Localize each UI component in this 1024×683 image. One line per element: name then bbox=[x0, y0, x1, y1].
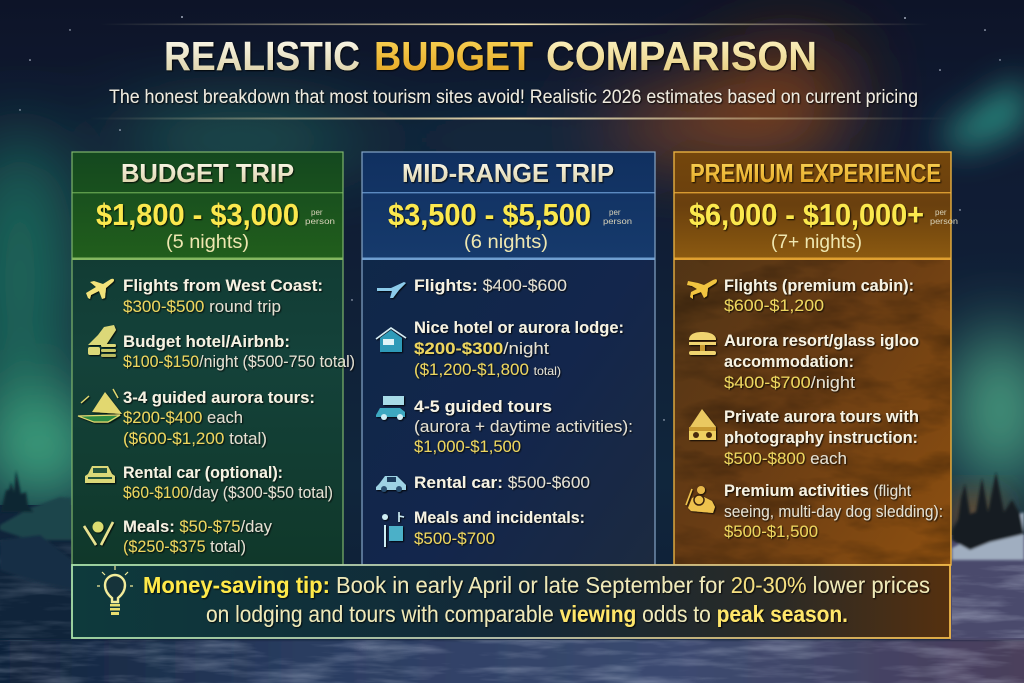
premium item: activities bbox=[686, 482, 943, 541]
tip text: on lodging and tours with comparable viewing odds to peak season. bbox=[206, 601, 848, 627]
tip text: Money-saving tip: Book in early April or late September for 20-30% lower prices bbox=[143, 572, 930, 598]
mid-range item: lodging: Nice hotel or aurora lodge: bbox=[414, 319, 624, 337]
budget item: flights: Flights from West Coast: bbox=[123, 277, 323, 295]
mid-range panel header: MID-RANGE TRIP bbox=[402, 158, 614, 188]
icon: light bulb bbox=[97, 566, 133, 615]
mid-range item: meals: Meals and incidentals: bbox=[414, 509, 585, 527]
mid-range panel body bbox=[362, 152, 655, 565]
budget item: hotel: Budget hotel/Airbnb: bbox=[123, 333, 290, 351]
premium panel header bbox=[674, 152, 958, 565]
premium panel header: per bbox=[935, 208, 947, 217]
mid-range panel header: (6 nights) bbox=[464, 232, 548, 253]
mid-range item: tours bbox=[376, 396, 633, 456]
budget item: aurora tours: 3-4 guided aurora tours: bbox=[123, 389, 315, 407]
premium panel body bbox=[674, 152, 951, 565]
budget item: flights bbox=[86, 277, 323, 316]
mid-range panel header: $3,500 - $5,500 bbox=[388, 197, 591, 232]
mid-range panel header: person bbox=[603, 217, 632, 226]
premium item: activities: seeing, multi-day dog sledding): bbox=[724, 503, 943, 521]
mid-range item: rental car: Rental car: $500-$600 bbox=[414, 474, 590, 492]
panel: premium experience bbox=[674, 152, 958, 565]
premium item: activities: $500-$1,500 bbox=[724, 523, 818, 541]
premium item: activities: Premium activities (flight bbox=[724, 482, 912, 500]
budget panel header bbox=[72, 152, 343, 565]
premium item: igloo accommodation: accommodation: bbox=[724, 353, 854, 371]
mid-range panel header: per bbox=[609, 208, 621, 217]
premium item: private tours: photography instruction: bbox=[724, 429, 918, 447]
budget panel body bbox=[72, 152, 343, 565]
premium item: flights bbox=[687, 277, 914, 315]
budget item: meals: ($250-$375 total) bbox=[123, 538, 246, 556]
budget panel header: BUDGET TRIP bbox=[121, 158, 294, 188]
title: REALISTIC bbox=[164, 33, 360, 79]
budget item: aurora tours: ($600-$1,200 total) bbox=[123, 430, 267, 448]
budget panel header: person bbox=[305, 217, 335, 226]
premium item: private tours: $500-$800 each bbox=[724, 450, 847, 468]
mid-range item: tours: $1,000-$1,500 bbox=[414, 438, 521, 456]
budget item: hotel bbox=[88, 325, 355, 371]
premium panel header: PREMIUM EXPERIENCE bbox=[690, 158, 941, 188]
premium panel header: person bbox=[930, 217, 958, 226]
panel: mid-range trip bbox=[362, 152, 655, 565]
mid-range item: flights bbox=[377, 277, 567, 298]
premium item: igloo accommodation: Aurora resort/glass igloo bbox=[724, 332, 919, 350]
premium item: flights: Flights (premium cabin): bbox=[724, 277, 914, 295]
budget item: rental car: Rental car (optional): bbox=[123, 464, 283, 482]
callout: money-saving tip bbox=[72, 565, 950, 638]
tip text bbox=[143, 572, 930, 627]
budget panel header: $1,800 - $3,000 bbox=[96, 197, 299, 232]
mid-range panel header bbox=[362, 152, 655, 565]
budget item: hotel: $100-$150/night ($500-750 total) bbox=[123, 353, 355, 371]
subtitle: The honest breakdown that most tourism sites avoid! Realistic 2026 estimates based on current pricing bbox=[109, 87, 918, 108]
title: COMPARISON bbox=[546, 33, 817, 79]
budget panel header: per bbox=[311, 208, 323, 217]
tip box bbox=[72, 565, 950, 638]
title rules bbox=[90, 24, 950, 120]
premium item: private tours bbox=[689, 408, 919, 468]
premium panel header: $6,000 - $10,000+ bbox=[689, 197, 924, 232]
mid-range item: tours: (aurora + daytime activities): bbox=[414, 418, 633, 436]
title: BUDGET bbox=[374, 33, 533, 79]
mid-range item: lodging: ($1,200-$1,800 total) bbox=[414, 361, 561, 379]
mid-range item: flights: Flights: $400-$600 bbox=[414, 277, 567, 295]
panel: budget trip bbox=[72, 152, 355, 565]
mid-range item: lodging: $200-$300 /night bbox=[414, 340, 549, 358]
premium panel texture bbox=[675, 260, 950, 564]
budget item: rental car bbox=[85, 464, 333, 502]
mid-range item: tours: 4-5 guided tours bbox=[414, 398, 552, 416]
premium item: flights: $600-$1,200 bbox=[724, 297, 824, 315]
budget item: aurora tours: $200-$400 each bbox=[123, 409, 243, 427]
title bbox=[164, 33, 817, 79]
budget panel header: (5 nights) bbox=[166, 232, 249, 253]
budget item: flights: $300-$500 round trip bbox=[123, 298, 281, 316]
budget item: meals: Meals: $50-$75/day bbox=[123, 518, 273, 536]
mid-range item: meals bbox=[382, 509, 585, 548]
budget item: aurora tours bbox=[78, 389, 315, 448]
budget item: meals bbox=[84, 518, 273, 556]
premium item: igloo accommodation: $400-$700 /night bbox=[724, 374, 855, 392]
premium item: private tours: Private aurora tours with bbox=[724, 408, 919, 426]
budget item: rental car: $60-$100/day ($300-$50 total) bbox=[123, 484, 333, 502]
mid-range item: meals: $500-$700 bbox=[414, 530, 495, 548]
premium item: igloo accommodation bbox=[689, 332, 919, 392]
mid-range item: lodging bbox=[376, 319, 624, 379]
premium panel header: (7+ nights) bbox=[771, 232, 862, 253]
